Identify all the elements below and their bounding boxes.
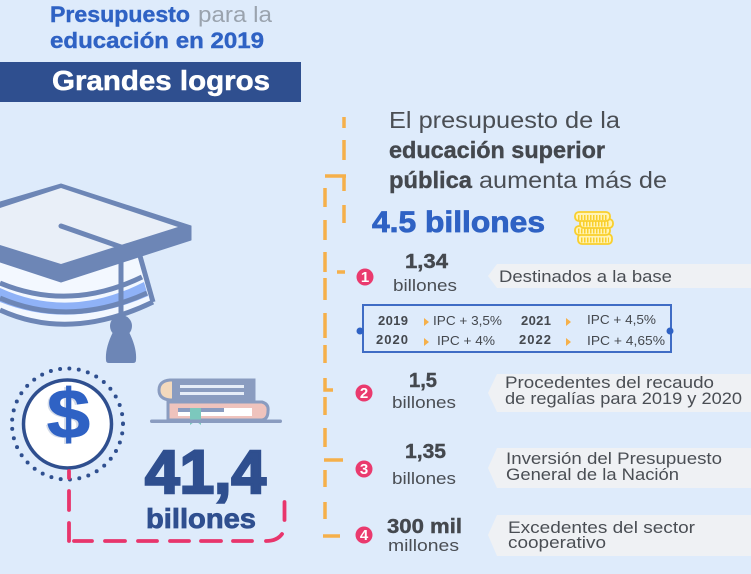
- item 1: 1,34 billones: Destinados a la base: [499, 267, 672, 286]
- item 3: 1,35 billones: General de la Nación: [506, 465, 679, 484]
- item 4: 300 mil millones: cooperativo: [508, 533, 606, 552]
- icon: dollar coin: [12, 368, 123, 480]
- title: para la: [198, 2, 273, 27]
- IPC table: IPC + 4,65%: [587, 333, 665, 348]
- item 2: 1,5 billones: de regalías para 2019 y 2020: [505, 389, 742, 408]
- item 2: 1,5 billones: 2: [360, 385, 368, 402]
- icon: dollar coin: $: [47, 375, 90, 453]
- item 3: 1,35 billones: 3: [360, 461, 368, 478]
- item 4: 300 mil millones: Excedentes del sector: [508, 518, 695, 537]
- intro text: aumenta más de: [479, 167, 667, 193]
- item 4: 300 mil millones: millones: [388, 536, 459, 555]
- intro text: educación superior: [389, 137, 605, 163]
- item 4: 300 mil millones: 300 mil: [387, 516, 462, 538]
- icon: stack of books: [150, 380, 282, 425]
- IPC table: 2021: [521, 313, 551, 328]
- item 3: 1,35 billones: billones: [392, 469, 456, 488]
- intro text: [389, 107, 667, 193]
- title: educación en 2019: [50, 28, 264, 53]
- icon: graduation cap: [0, 184, 191, 363]
- item 1: 1,34 billones: billones: [393, 276, 457, 295]
- item 2: 1,5 billones: 1,5: [409, 370, 437, 392]
- item 3: 1,35 billones: [356, 441, 751, 488]
- item 1: 1,34 billones: 1: [361, 269, 369, 286]
- item 2: 1,5 billones: billones: [392, 393, 456, 412]
- item 3: 1,35 billones: Inversión del Presupuesto: [506, 449, 722, 468]
- total: 41,4 billones: 41,4: [145, 438, 266, 506]
- item 4: 300 mil millones: 4: [360, 527, 369, 544]
- item 1: 1,34 billones: [356, 251, 751, 295]
- orange dashed timeline: [323, 117, 346, 536]
- item 4: 300 mil millones: [356, 515, 751, 556]
- icon: coins: [575, 212, 613, 244]
- icon: dollar coin: $: [45, 376, 87, 454]
- IPC table: 2019: [378, 313, 408, 328]
- IPC table: IPC + 4,5%: [587, 312, 656, 327]
- total: 41,4 billones: [145, 438, 266, 534]
- IPC table: 2022: [519, 332, 551, 347]
- total: 41,4 billones: billones: [146, 503, 256, 534]
- pink dashed connector: [69, 471, 284, 541]
- IPC table: IPC + 4%: [437, 333, 495, 348]
- intro text: El presupuesto de la: [389, 107, 620, 133]
- intro text: pública: [389, 167, 472, 193]
- item 1: 1,34 billones: 1,34: [405, 251, 449, 273]
- IPC table: IPC + 3,5%: [433, 313, 502, 328]
- heading band: Grandes logros: [0, 62, 301, 102]
- item 2: 1,5 billones: Procedentes del recaudo: [505, 373, 714, 392]
- item 3: 1,35 billones: 1,35: [405, 441, 446, 463]
- IPC table: [356, 305, 674, 352]
- headline: 4.5 billones: 4.5 billones: [372, 206, 545, 239]
- item 2: 1,5 billones: [356, 370, 751, 412]
- title: [50, 2, 273, 53]
- heading band: Grandes logros: Grandes logros: [52, 65, 270, 96]
- title: Presupuesto: [50, 2, 190, 27]
- IPC table: 2020: [376, 332, 408, 347]
